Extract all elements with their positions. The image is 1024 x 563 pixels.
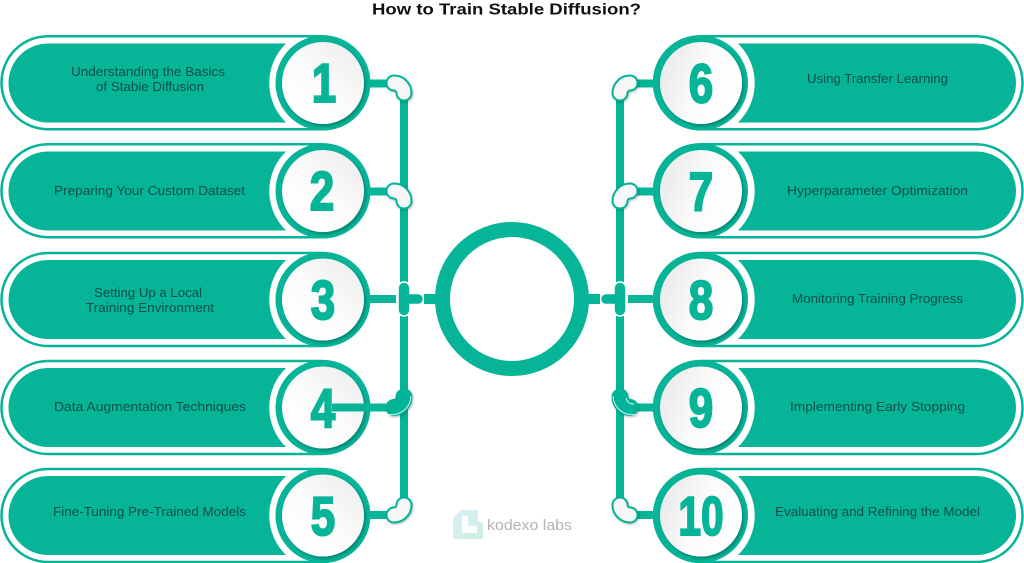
number disc 7 xyxy=(653,144,748,238)
step 2 panel xyxy=(2,144,404,238)
number disc 8 xyxy=(653,252,748,347)
elbow joint 1 xyxy=(394,83,404,93)
connector stub 9 xyxy=(630,404,656,412)
number 4: 4 xyxy=(311,377,335,439)
logo mark xyxy=(453,510,483,539)
right vertical connector line xyxy=(616,90,624,508)
number disc 1 xyxy=(276,36,370,130)
connector stub 10 xyxy=(632,511,656,519)
elbow joint 10 xyxy=(620,505,630,515)
connector stub 6 xyxy=(632,80,656,88)
teal label pill xyxy=(738,44,1016,122)
outer pill outline xyxy=(654,469,1022,562)
number 1: 1 xyxy=(312,52,336,114)
step 10 panel xyxy=(620,468,1022,563)
step 1 label: of Stable Diffusion xyxy=(96,79,204,94)
outer pill outline xyxy=(2,361,368,454)
teal label pill xyxy=(738,152,1016,230)
left T junction xyxy=(398,282,437,316)
number 8: 8 xyxy=(689,269,713,331)
outer pill outline xyxy=(2,469,368,562)
step 9 label: Implementing Early Stopping xyxy=(790,399,965,414)
outer pill outline xyxy=(654,144,1022,237)
step 4 panel xyxy=(2,360,411,455)
connector stub 1 xyxy=(368,80,392,88)
number disc 2 xyxy=(276,144,370,238)
step 1 label: Understanding the Basics xyxy=(71,64,225,79)
connector stub 7 xyxy=(632,188,656,196)
connector stub 2 xyxy=(368,188,392,196)
step 9 panel xyxy=(613,360,1022,455)
outer pill outline xyxy=(654,361,1022,454)
step 7 panel xyxy=(620,144,1022,238)
step 5 label: Fine-Tuning Pre-Trained Models xyxy=(53,504,246,519)
number 3: 3 xyxy=(311,269,335,331)
step 6 label: Using Transfer Learning xyxy=(807,71,948,86)
step 6 panel xyxy=(620,36,1022,130)
step 3 label: Training Environment xyxy=(86,300,214,315)
connector stub 5 xyxy=(368,511,392,519)
central ring xyxy=(442,230,582,368)
teal label pill xyxy=(9,260,286,339)
number disc 10 xyxy=(653,468,748,563)
step 4 label: Data Augmentation Techniques xyxy=(54,399,246,414)
teal label pill xyxy=(738,260,1016,339)
number 6: 6 xyxy=(689,53,713,115)
step 5 panel xyxy=(2,468,404,563)
number disc 4 xyxy=(276,360,370,455)
step 3 panel xyxy=(2,252,396,347)
connector line 4 xyxy=(332,404,398,412)
right T junction xyxy=(587,282,626,316)
teal label pill xyxy=(9,152,286,230)
step 3 label: Setting Up a Local xyxy=(94,285,202,300)
step 2 label: Preparing Your Custom Dataset xyxy=(54,183,245,198)
number disc 3 xyxy=(276,252,370,347)
number 5: 5 xyxy=(311,485,335,547)
outer pill outline xyxy=(654,253,1022,346)
elbow joint 4 xyxy=(388,396,411,415)
step 10 label: Evaluating and Refining the Model xyxy=(775,504,980,519)
number 2: 2 xyxy=(310,160,334,222)
elbow joint 5 xyxy=(394,505,404,515)
number disc 9 xyxy=(653,360,748,455)
elbow joint 9 xyxy=(613,396,636,415)
left vertical connector line xyxy=(400,90,408,508)
step 7 label: Hyperparameter Optimization xyxy=(787,183,968,198)
elbow joint 6 xyxy=(620,83,630,93)
number 7: 7 xyxy=(689,161,713,223)
outer pill outline xyxy=(2,253,368,346)
outer pill outline xyxy=(654,36,1022,129)
connector stub 3 xyxy=(368,295,396,303)
step 8 panel xyxy=(628,252,1022,347)
outer pill outline xyxy=(2,36,368,129)
connector stub 8 xyxy=(628,295,656,303)
teal label pill xyxy=(738,368,1016,447)
number 10: 10 xyxy=(678,486,724,548)
teal label pill xyxy=(9,368,286,447)
teal label pill xyxy=(738,476,1016,555)
logo: kodexo labs xyxy=(453,510,572,539)
elbow joint 7 xyxy=(620,191,630,201)
step 8 label: Monitoring Training Progress xyxy=(792,291,963,306)
number disc 6 xyxy=(653,36,748,130)
logo wordmark: kodexo labs xyxy=(487,518,572,534)
teal label pill xyxy=(9,476,286,555)
number disc 5 xyxy=(276,468,370,563)
title: How to Train Stable Diffusion? xyxy=(372,2,641,18)
outer pill outline xyxy=(2,144,368,237)
number 9: 9 xyxy=(689,377,713,439)
step 1 panel xyxy=(2,36,404,130)
elbow joint 2 xyxy=(394,191,404,201)
teal label pill xyxy=(9,44,286,122)
